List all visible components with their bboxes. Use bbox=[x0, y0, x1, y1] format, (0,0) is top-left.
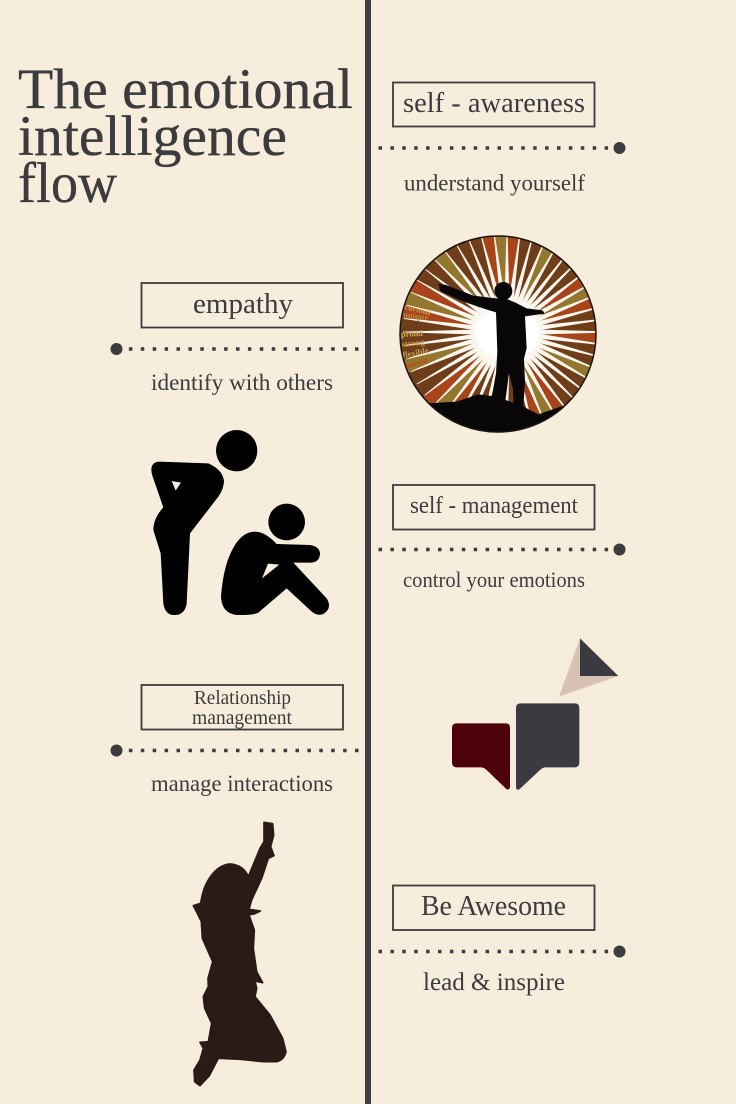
panel: be awesome bbox=[378, 886, 626, 996]
title: The emotional bbox=[18, 58, 353, 121]
panel: empathy bbox=[110, 283, 358, 395]
title: flow bbox=[18, 152, 117, 215]
panel: relationship management: Relationship bbox=[194, 688, 291, 709]
icon: sunburst with silhouette: flexible bbox=[401, 345, 430, 360]
icon: sunburst with silhouette: unique bbox=[403, 309, 429, 322]
icon: sunburst with silhouette: curious bbox=[404, 301, 433, 318]
icon: speech bubbles and triangle bbox=[452, 638, 618, 790]
panel: self-management: control your emotions bbox=[403, 567, 585, 592]
icon: jumping woman silhouette bbox=[193, 822, 286, 1086]
icon: one figure comforting another bbox=[151, 430, 329, 615]
panel: self-awareness bbox=[378, 82, 626, 196]
panel: empathy: identify with others bbox=[151, 370, 333, 395]
title bbox=[18, 58, 353, 215]
panel: self-awareness: understand yourself bbox=[404, 170, 585, 196]
panel: self-management: self - management bbox=[410, 493, 578, 519]
central vertical divider bbox=[365, 0, 371, 1104]
panel: be awesome: Be Awesome bbox=[421, 890, 566, 922]
panel: self-management bbox=[378, 485, 626, 592]
panel: empathy: empathy bbox=[193, 288, 293, 320]
icon: sunburst with silhouette: honest bbox=[404, 354, 429, 371]
panel: relationship management: management bbox=[192, 708, 293, 729]
icon: sunburst with silhouette bbox=[399, 235, 597, 433]
panel: relationship management: manage interactions bbox=[151, 771, 333, 796]
panel: be awesome: lead & inspire bbox=[423, 969, 565, 996]
panel: relationship management bbox=[110, 685, 358, 796]
panel: self-awareness: self - awareness bbox=[403, 87, 585, 119]
icon: sunburst with silhouette: proud bbox=[401, 328, 423, 339]
icon: sunburst with silhouette: strong bbox=[401, 337, 426, 349]
title: intelligence bbox=[18, 105, 287, 168]
